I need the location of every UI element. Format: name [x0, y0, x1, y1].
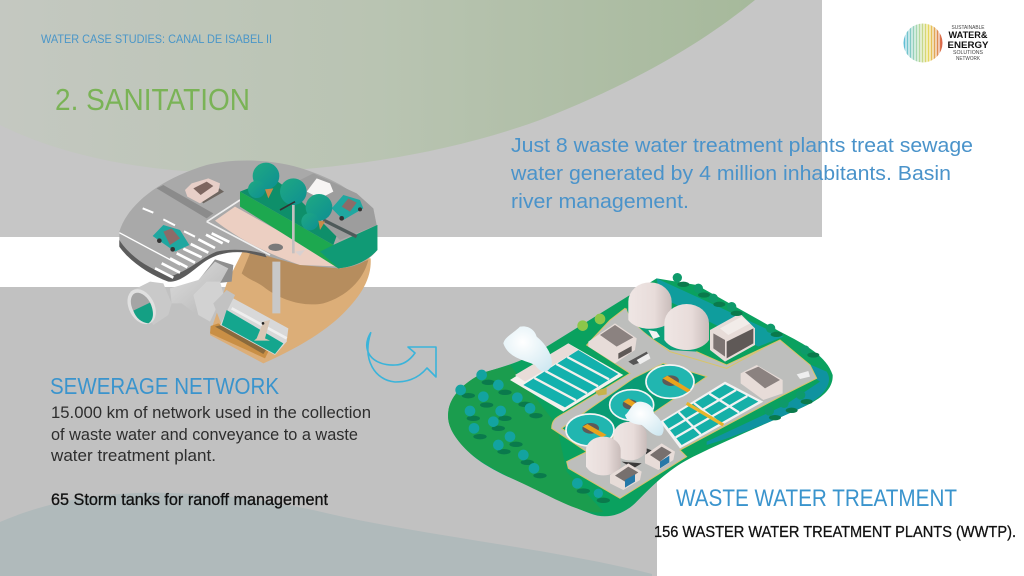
logo: ENERGY: [948, 40, 988, 50]
title: 2. SANITATION: [55, 82, 250, 117]
cars: [185, 178, 224, 203]
decorative blue-grey wave: [0, 493, 652, 576]
dark shadows: [622, 448, 663, 468]
logo: WATER&: [948, 30, 988, 40]
steam clouds: [503, 326, 664, 436]
background panel: top: [0, 0, 822, 237]
sewerage network body: 15.000 km of network used in the collection: [51, 404, 371, 422]
intro text block: [510, 135, 973, 213]
decorative green ellipse: [0, 0, 755, 172]
green island: [448, 278, 833, 516]
sedimentation basin: [510, 343, 623, 412]
pipes: [122, 259, 288, 355]
sewerage network body: of waste water and conveyance to a waste: [51, 426, 358, 444]
plant ground: [552, 308, 817, 498]
illustration: sewerage network: [119, 160, 377, 363]
storage tanks: [586, 282, 709, 475]
service lane: [157, 185, 213, 218]
header label: WATER CASE STUDIES: CANAL DE ISABEL II: [41, 34, 272, 46]
timber base: [210, 323, 268, 358]
clarifier plot: [562, 363, 707, 448]
logo: NETWORK: [956, 56, 981, 62]
road markings: [119, 200, 270, 278]
intro text block: water generated by 4 million inhabitants. Basin: [510, 163, 951, 185]
trees: [248, 163, 332, 230]
green hedge: [240, 192, 377, 268]
curved arrow: [367, 333, 436, 382]
parking strip: [287, 173, 377, 240]
sewerage network body: water treatment plant.: [50, 447, 216, 465]
sewerage network body: [50, 404, 371, 465]
logo: SUSTAINABLE: [952, 25, 985, 31]
pavement: [215, 207, 343, 267]
soil: [210, 250, 371, 363]
intro text block: Just 8 waste water treatment plants treat sewage: [511, 135, 973, 157]
sewerage network heading: SEWERAGE NETWORK: [50, 373, 280, 399]
manhole: [268, 244, 283, 251]
background panel: bottom: [0, 287, 657, 576]
buildings: [588, 313, 783, 490]
lamp post: [289, 205, 297, 253]
vehicles: [648, 330, 660, 339]
road surface: [119, 160, 377, 280]
intro text block: river management.: [511, 191, 689, 213]
logo: SOLUTIONS: [953, 50, 984, 56]
trees on the green: [455, 273, 819, 503]
storm tanks note: 65 Storm tanks for ranoff management: [51, 491, 328, 509]
vertical drain pipe: [272, 262, 280, 313]
river channels: [657, 278, 783, 347]
clarifiers: [566, 365, 694, 446]
logo: [904, 22, 988, 64]
aeration basin grid: [660, 382, 763, 448]
waste water treatment heading: WASTE WATER TREATMENT: [676, 485, 957, 512]
illustration: waste water treatment plant: [448, 273, 833, 516]
